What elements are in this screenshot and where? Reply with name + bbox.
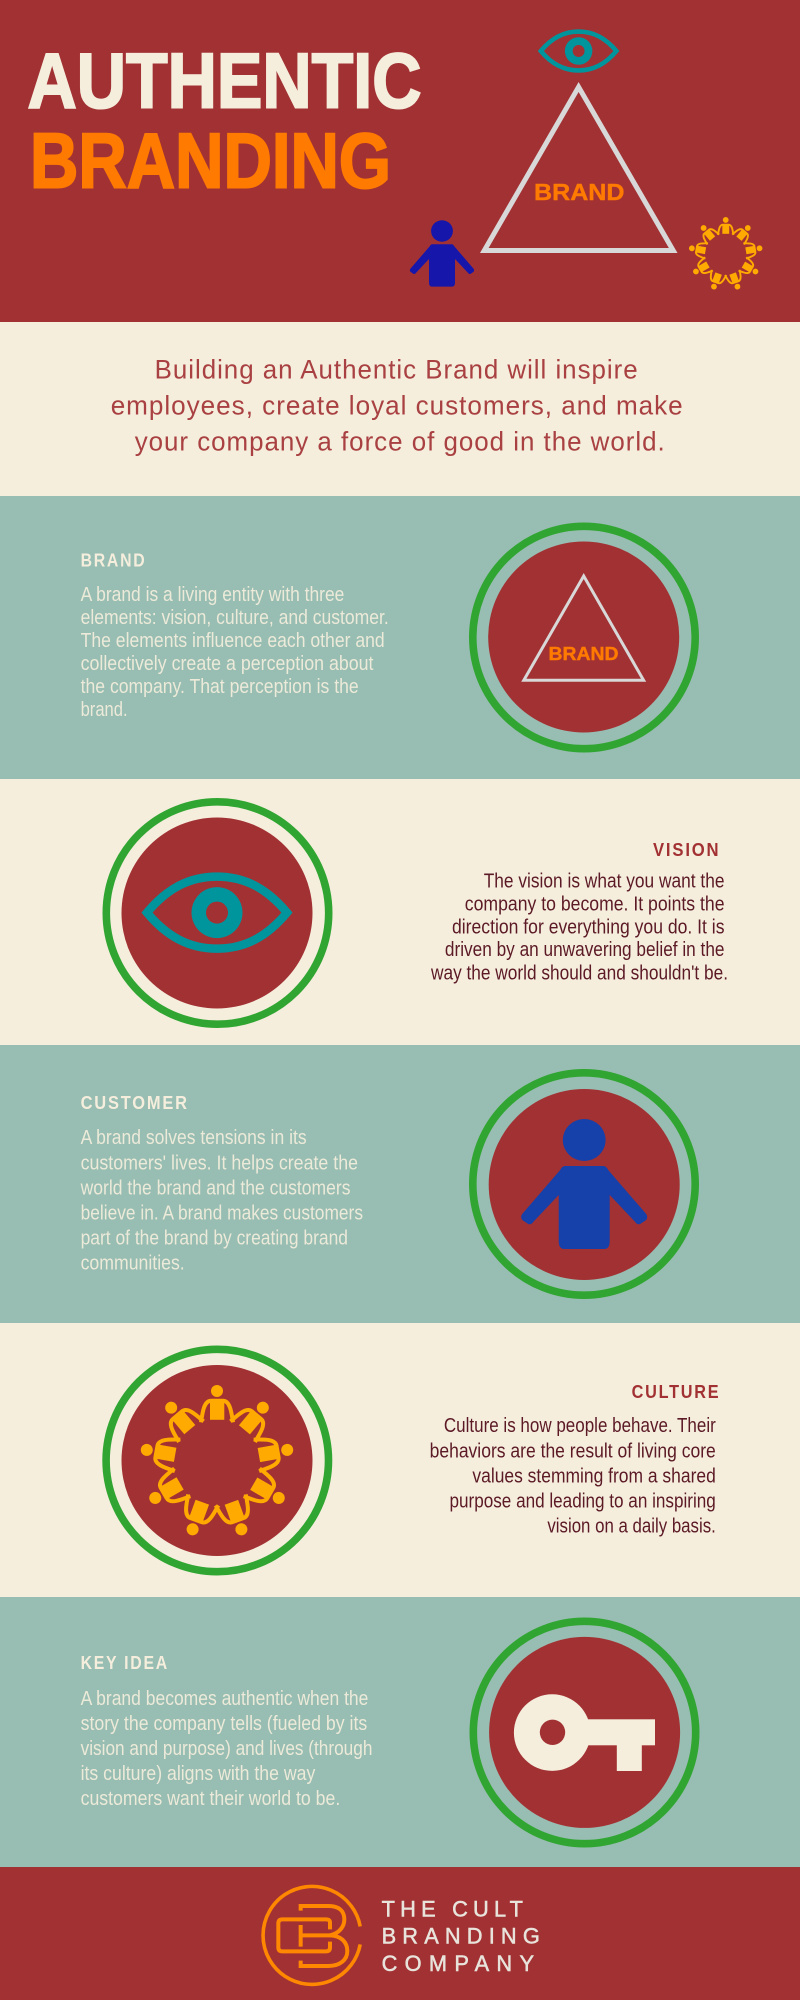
icon: customer small	[410, 220, 474, 287]
text: key idea description	[81, 1688, 372, 1810]
panel: culture	[0, 1323, 800, 1597]
title: Branding: BRANDING	[30, 116, 391, 204]
text: vision description: company to become. It points the	[465, 894, 724, 916]
text: culture description: vision on a daily basis.	[547, 1516, 716, 1538]
panel: footer	[0, 1867, 800, 2000]
logo: wordmark: BRANDING	[382, 1924, 540, 1949]
heading: culture: CULTURE	[632, 1381, 720, 1402]
panel: vision	[0, 779, 800, 1045]
text: brand description: brand.	[81, 699, 128, 721]
text: vision description	[430, 870, 728, 984]
text: culture description: values stemming from a shared	[472, 1465, 716, 1487]
intro text	[111, 355, 684, 457]
panel: intro	[0, 322, 800, 496]
text: brand description: collectively create a perception about	[81, 653, 374, 675]
intro text: your company a force of good in the world.	[135, 427, 666, 457]
logo: wordmark	[382, 1897, 540, 1976]
text: brand description	[81, 584, 389, 721]
panel: brand	[0, 496, 800, 779]
title: Authentic: AUTHENTIC	[28, 36, 422, 124]
icon: culture small	[688, 217, 764, 292]
text: vision description: way the world should and shouldn't be.	[430, 962, 728, 984]
text: brand description: The elements influence each other and	[81, 630, 385, 652]
text: brand description: elements: vision, culture, and customer.	[81, 607, 389, 629]
logo: CB mark	[263, 1886, 360, 1984]
icon: key badge	[473, 1621, 696, 1844]
icon: customer badge	[473, 1073, 695, 1295]
text: culture description	[430, 1415, 716, 1538]
icon: brand triangle: BRAND	[534, 179, 624, 205]
text: culture description: Culture is how people behave. Their	[444, 1415, 716, 1437]
heading: vision: VISION	[653, 839, 720, 860]
text: customer description: communities.	[81, 1252, 185, 1274]
text: customer description: A brand solves tensions in its	[81, 1127, 307, 1149]
text: culture description: behaviors are the result of living core	[430, 1440, 716, 1462]
icon: eye small	[541, 32, 616, 70]
text: brand description: the company. That perception is the	[81, 676, 359, 698]
text: customer description: customers' lives. It helps create the	[81, 1152, 358, 1174]
icon: vision badge	[106, 802, 329, 1024]
text: customer description: believe in. A brand makes customers	[81, 1202, 363, 1224]
heading: key idea: KEY IDEA	[81, 1652, 169, 1673]
icon: culture badge	[106, 1349, 328, 1572]
text: customer description: world the brand and the customers	[80, 1178, 350, 1200]
text: vision description: The vision is what you want the	[484, 870, 724, 892]
intro text: Building an Authentic Brand will inspire	[155, 355, 639, 385]
heading: brand: BRAND	[81, 550, 146, 571]
panel: key idea	[0, 1597, 800, 1867]
panel: customer	[0, 1045, 800, 1323]
text: brand description: A brand is a living entity with three	[81, 584, 344, 606]
text: culture description: purpose and leading to an inspiring	[450, 1490, 716, 1512]
text: vision description: direction for everything you do. It is	[452, 916, 724, 938]
logo: wordmark: COMPANY	[382, 1951, 534, 1976]
text: key idea description: its culture) aligns with the way	[81, 1763, 315, 1785]
icon: brand triangle	[484, 87, 673, 250]
text: vision description: driven by an unwavering belief in the	[445, 939, 724, 961]
text: key idea description: A brand becomes authentic when the	[81, 1688, 368, 1710]
text: customer description	[80, 1127, 363, 1274]
logo: wordmark: THE CULT	[382, 1897, 523, 1922]
text: customer description: part of the brand by creating brand	[81, 1227, 348, 1249]
icon: brand badge	[473, 526, 695, 749]
text: key idea description: customers want their world to be.	[81, 1788, 340, 1810]
icon: brand badge: BRAND	[548, 644, 618, 664]
intro text: employees, create loyal customers, and make	[111, 391, 684, 421]
heading: customer: CUSTOMER	[81, 1092, 189, 1113]
text: key idea description: vision and purpose) and lives (through	[81, 1738, 372, 1760]
panel: header	[0, 0, 800, 322]
text: key idea description: story the company tells (fueled by its	[81, 1713, 367, 1735]
